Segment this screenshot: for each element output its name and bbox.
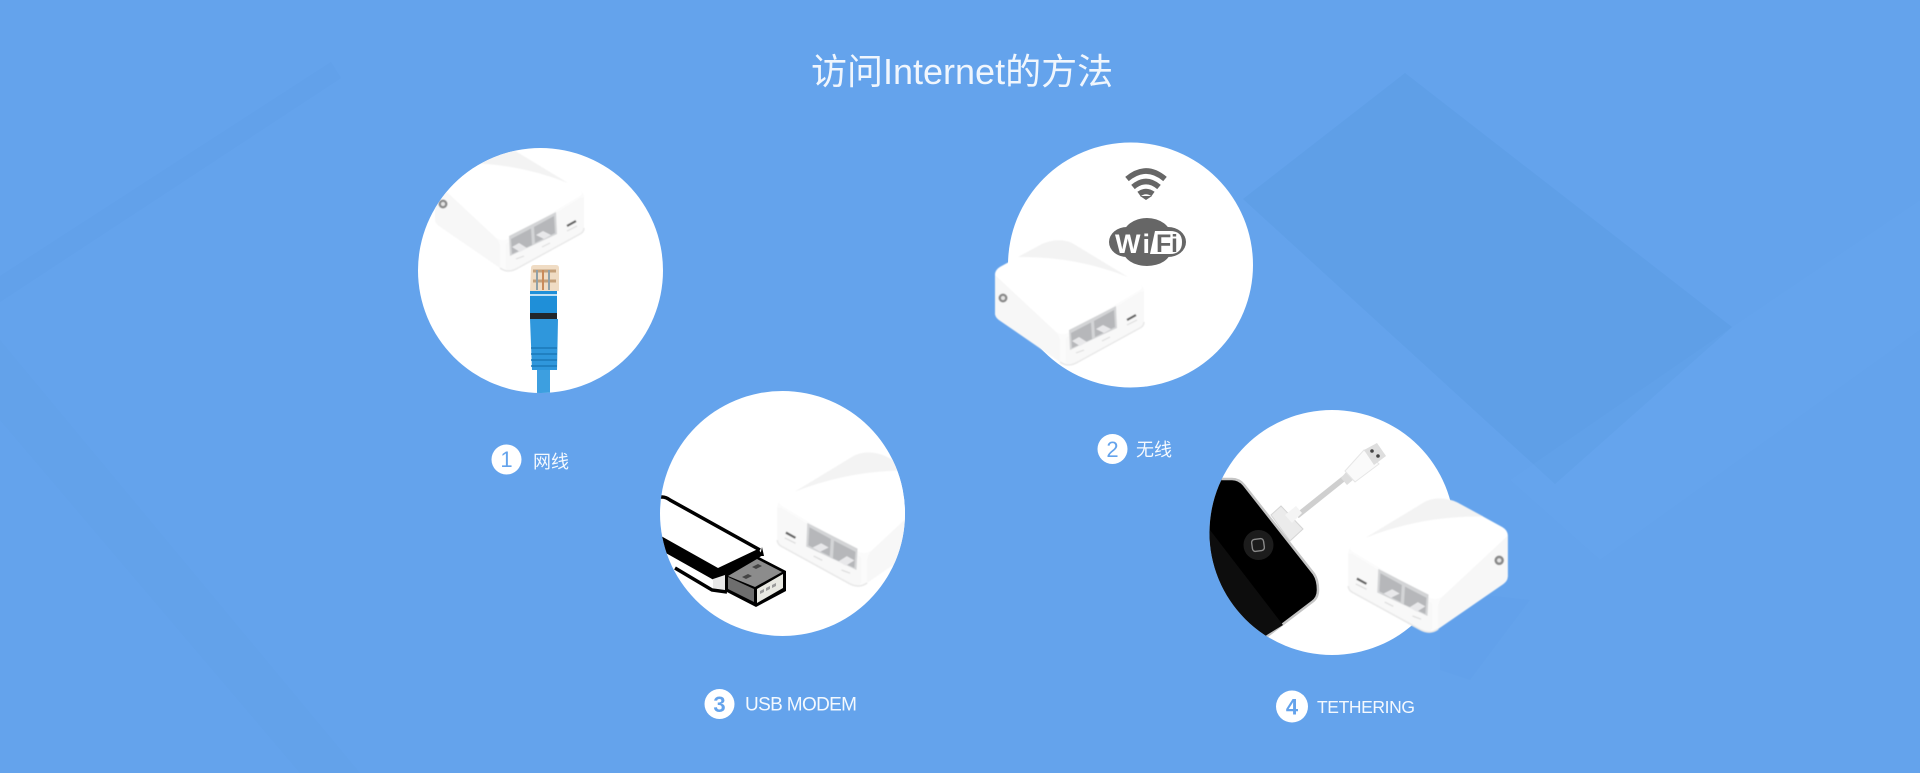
label: 1 网线: 网线 [533, 452, 569, 472]
label: 4 TETHERING [1276, 690, 1415, 722]
label: 4 TETHERING: TETHERING [1317, 697, 1415, 717]
icon: dock cable [1271, 443, 1386, 541]
label: 3 USB MODEM: USB MODEM [745, 694, 857, 716]
label: 3 USB MODEM: 3 [713, 692, 726, 717]
label: 3 USB MODEM [704, 689, 857, 719]
icon: router (ethernet view) [435, 146, 584, 271]
label: 1 网线 [492, 444, 569, 474]
icon: phone [1210, 478, 1320, 637]
label: 2 无线 [1098, 434, 1172, 464]
icon: router (wireless view) [995, 240, 1144, 365]
icon: ethernet cable plug [530, 265, 559, 396]
panel: wireless circle [995, 142, 1253, 388]
panel: ethernet cable circle [418, 146, 663, 396]
icon: USB stick [655, 497, 786, 607]
panel: USB modem circle [660, 391, 905, 636]
label: 1 网线: 1 [500, 447, 513, 472]
title: 访问Internet的方法 [811, 51, 1113, 92]
icon: wifi cloud logo: Fi [1156, 230, 1178, 258]
icon: wifi cloud logo: Wi [1115, 229, 1150, 259]
icon: wifi cloud logo [1109, 218, 1186, 266]
panel: tethering circle [1210, 410, 1509, 655]
label: 2 无线: 2 [1106, 437, 1119, 462]
icon: router (usb view) [776, 453, 905, 587]
label: 2 无线: 无线 [1136, 440, 1172, 460]
icon: wifi signal [1127, 171, 1165, 200]
icon: router (tethering view) [1348, 499, 1508, 632]
label: 4 TETHERING: 4 [1286, 694, 1299, 720]
